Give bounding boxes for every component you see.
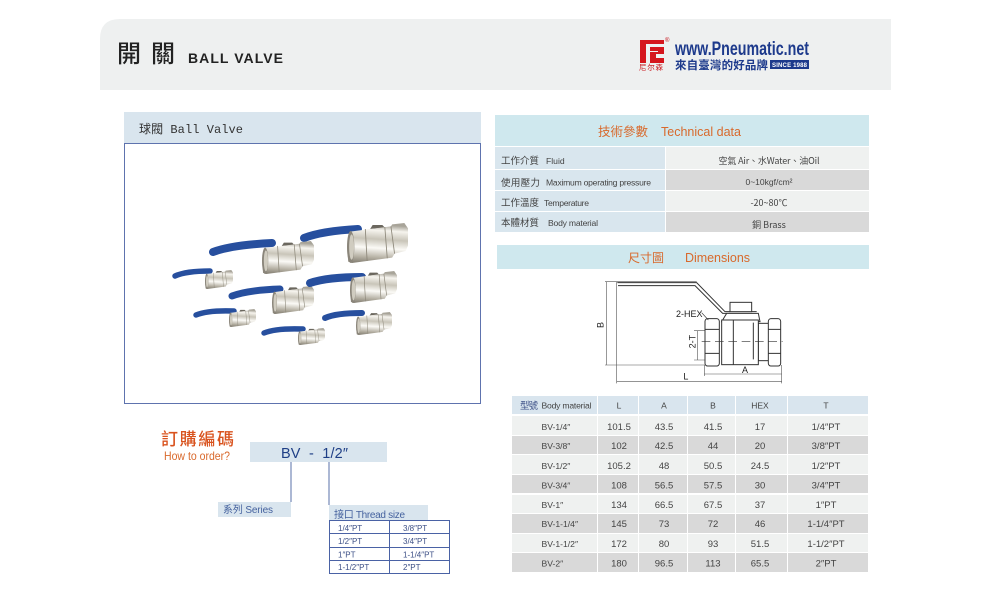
row BV-3/8: BV-3/8″ <box>542 441 570 451</box>
row BV-1-1/4: 46 <box>755 519 765 530</box>
dimensions table <box>512 396 868 572</box>
valve 5 <box>310 271 397 303</box>
title: 開關 BALL VALVE: 開 關 <box>117 34 175 69</box>
valve 4 <box>232 286 314 314</box>
row BV-3/8: 3/8″PT <box>812 441 841 452</box>
row BV-1: BV-1″ <box>542 500 563 510</box>
row BV-1-1/2: 172 <box>611 539 627 550</box>
order heading: 訂購編碼 <box>161 425 234 450</box>
header band <box>100 19 891 90</box>
table header: B <box>710 400 716 410</box>
row BV-1/2: BV-1/2″ <box>542 461 570 471</box>
row BV-1-1/2: BV-1-1/2″ <box>542 539 578 549</box>
series label <box>218 502 291 517</box>
row: fluid: 工作介質 <box>501 153 539 167</box>
row BV-1/2: 50.5 <box>704 461 722 472</box>
row BV-1-1/2: 51.5 <box>751 539 769 550</box>
row BV-1/2 <box>542 461 841 472</box>
row BV-3/4: 56.5 <box>655 480 673 492</box>
row: pressure: 0~10kgf/cm² <box>745 177 793 187</box>
order heading: How to order? <box>164 449 230 463</box>
row BV-3/4: 57.5 <box>704 480 722 492</box>
row BV-1-1/4: BV-1-1/4″ <box>542 519 578 529</box>
row BV-3/4: 30 <box>755 480 765 492</box>
dimension drawing <box>596 282 783 383</box>
logo <box>639 37 809 73</box>
row BV-1: 1″PT <box>816 500 837 511</box>
order code section <box>161 425 450 574</box>
row: temperature <box>501 195 788 209</box>
valve 3 <box>175 270 233 289</box>
logo: 來自臺灣的好品牌 <box>675 57 768 73</box>
thread size table: 1/2″PT <box>338 537 362 546</box>
row BV-3/4: 3/4″PT <box>812 480 841 492</box>
panel: dimensions heading <box>497 245 869 269</box>
row: pressure <box>501 175 793 189</box>
dimension labels: B <box>596 322 606 328</box>
row BV-3/8 <box>542 441 841 452</box>
row BV-2: 180 <box>611 558 627 570</box>
logo: SINCE 1988 <box>772 63 808 69</box>
row BV-2: 2″PT <box>816 558 837 570</box>
thread size table: 1-1/4″PT <box>403 550 434 560</box>
valve 8 <box>325 312 392 335</box>
valve 2 <box>213 241 314 274</box>
row BV-1/2: 24.5 <box>751 461 769 472</box>
row BV-1-1/2: 1-1/2″PT <box>807 539 845 550</box>
row: temperature: 工作溫度 <box>501 195 539 209</box>
row: body material: 銅 Brass <box>752 218 786 231</box>
thread size table <box>329 505 450 574</box>
panel: ball valve photo <box>124 112 481 404</box>
table header: HEX <box>751 400 769 410</box>
thread size table: 1″PT <box>338 550 356 560</box>
row: temperature: Temperature <box>544 198 589 208</box>
table header: 型號 <box>520 398 538 412</box>
row BV-2: BV-2″ <box>542 558 563 568</box>
row: body material <box>501 215 786 231</box>
row BV-1/4: 41.5 <box>704 422 722 433</box>
row BV-1/4: 1/4″PT <box>812 422 841 433</box>
row BV-3/8: 42.5 <box>655 441 673 452</box>
technical data heading: 技術參數 <box>598 121 648 140</box>
table header: Body material <box>542 400 592 410</box>
title: 開關 BALL VALVE <box>117 34 283 69</box>
row BV-1-1/4: 73 <box>659 519 669 530</box>
row BV-1-1/4: 145 <box>611 519 627 530</box>
table header: L <box>617 400 622 410</box>
row: fluid: 空氣 Air、水Water、油Oil <box>718 154 820 167</box>
row BV-1/4: 43.5 <box>655 422 673 433</box>
thread size table: 3/4″PT <box>403 537 427 546</box>
row BV-2: 113 <box>705 558 721 570</box>
thread size table: 1/4″PT <box>338 524 362 533</box>
thread size table: 接口 Thread size <box>334 508 405 521</box>
model code box: BV - 1/2″ <box>281 446 348 462</box>
valve 1 <box>304 223 408 263</box>
row BV-1/2: 105.2 <box>607 461 631 472</box>
logo: ® <box>665 37 670 44</box>
model code box <box>250 442 387 462</box>
dimension labels: A <box>742 365 748 375</box>
row BV-1-1/2: 80 <box>659 539 669 550</box>
row: pressure: Maximum operating pressure <box>546 178 651 188</box>
panel: dimensions heading: Dimensions <box>685 251 750 265</box>
row BV-1/2: 48 <box>659 461 669 472</box>
row BV-3/8: 102 <box>611 441 627 452</box>
row BV-2: 65.5 <box>751 558 769 570</box>
row BV-1/4: 17 <box>755 422 765 433</box>
logo: www.Pneumatic.net <box>674 39 809 60</box>
row BV-2 <box>542 558 837 570</box>
valve 6 <box>196 309 256 327</box>
series label: 系列 Series <box>223 503 273 516</box>
panel heading: 球閥 Ball Valve <box>139 122 243 137</box>
valve handle <box>617 283 757 313</box>
table header <box>520 398 829 412</box>
row BV-1-1/4: 1-1/4″PT <box>807 519 845 530</box>
row BV-2: 96.5 <box>655 558 673 570</box>
row BV-1: 134 <box>611 500 627 511</box>
row BV-3/4: 108 <box>611 480 627 492</box>
row: pressure: 使用壓力 <box>501 175 540 189</box>
row BV-1/2: 1/2″PT <box>812 461 841 472</box>
valve 7 <box>264 328 325 345</box>
thread size table: 3/8″PT <box>403 524 427 533</box>
row BV-1-1/2 <box>542 539 845 550</box>
row: body material: Body material <box>548 218 598 228</box>
row: body material: 本體材質 <box>501 215 539 229</box>
row BV-1/4 <box>542 422 841 433</box>
table header: A <box>661 400 667 410</box>
panel: technical data <box>495 115 869 232</box>
valve photo group <box>175 223 408 345</box>
row BV-1-1/2: 93 <box>708 539 718 550</box>
row BV-1/4: 101.5 <box>607 422 631 433</box>
title: 開關 BALL VALVE: BALL VALVE <box>188 50 283 66</box>
valve body <box>702 302 783 366</box>
row BV-3/4: BV-3/4″ <box>542 480 570 490</box>
technical data heading: Technical data <box>661 125 741 139</box>
thread size table: 1-1/2″PT <box>338 563 369 572</box>
row BV-3/8: 44 <box>708 441 718 452</box>
row BV-3/4 <box>542 480 841 492</box>
row: temperature: -20~80℃ <box>750 196 788 209</box>
logo: 尼尔森 <box>639 62 664 73</box>
dimension labels: L <box>683 371 688 381</box>
order heading <box>161 425 234 463</box>
panel: dimensions heading: 尺寸圖 <box>628 249 664 266</box>
table header: T <box>823 400 829 410</box>
row BV-1-1/4 <box>542 519 845 530</box>
row BV-1: 37 <box>755 500 765 511</box>
dimension labels <box>596 309 748 381</box>
row BV-1/4: BV-1/4″ <box>542 422 570 432</box>
thread size table: 2″PT <box>403 563 421 572</box>
row BV-1 <box>542 500 837 511</box>
row BV-1: 66.5 <box>655 500 673 511</box>
technical data heading <box>598 121 741 140</box>
row: fluid: Fluid <box>546 156 565 166</box>
dimension labels: 2-HEX <box>676 309 702 319</box>
row BV-1-1/4: 72 <box>708 519 718 530</box>
row BV-1: 67.5 <box>704 500 722 511</box>
dimension labels: 2-T <box>687 334 697 348</box>
row: fluid <box>501 153 820 167</box>
row BV-3/8: 20 <box>755 441 765 452</box>
